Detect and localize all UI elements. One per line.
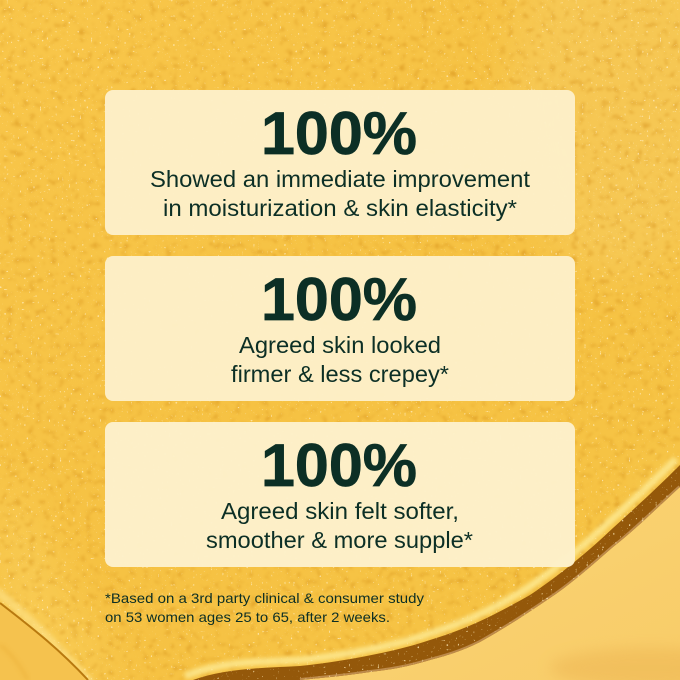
footnote bbox=[105, 590, 424, 625]
stat: 100%: 100% bbox=[261, 432, 417, 499]
panel: softer skin bbox=[105, 422, 575, 567]
description bbox=[206, 498, 473, 553]
description bbox=[150, 166, 531, 221]
description bbox=[231, 332, 449, 387]
footnote: *Based on a 3rd party clinical & consumer study bbox=[105, 590, 424, 606]
description: in moisturization & skin elasticity* bbox=[163, 195, 517, 221]
panel: firmer skin bbox=[105, 256, 575, 401]
panel: immediate improvement bbox=[105, 90, 575, 235]
description: Agreed skin felt softer, bbox=[221, 498, 459, 524]
description: Agreed skin looked bbox=[239, 332, 441, 358]
description: smoother & more supple* bbox=[206, 527, 473, 553]
description: Showed an immediate improvement bbox=[150, 166, 531, 192]
description: firmer & less crepey* bbox=[231, 361, 449, 387]
background: lower right light area and amber oil edge bbox=[193, 465, 680, 680]
footnote: on 53 women ages 25 to 65, after 2 weeks. bbox=[105, 609, 390, 625]
stat: 100%: 100% bbox=[261, 100, 417, 167]
stat: 100%: 100% bbox=[261, 266, 417, 333]
background: lower left droplet edge bbox=[0, 603, 88, 680]
